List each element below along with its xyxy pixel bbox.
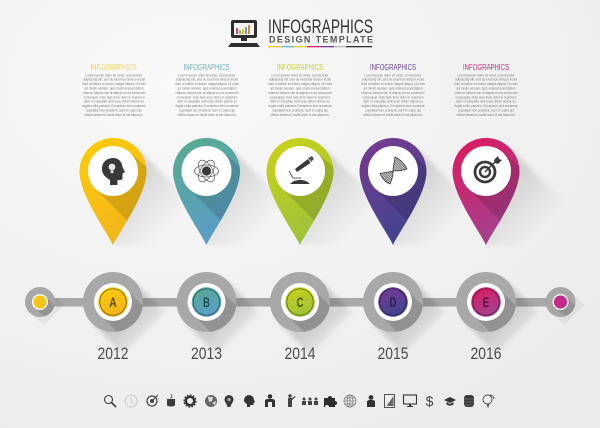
icon: head silhouette <box>244 395 255 407</box>
text block 5: Lorem ipsum dolor sit amet, consectetur <box>458 73 515 77</box>
text block 2: adipiscing elit, sed do eiusmod tempor incidi <box>176 78 238 82</box>
text block 5: ullamco laboris nisi ut aliquip ex ea commodo <box>454 91 518 95</box>
timeline bar <box>40 298 560 306</box>
icon: gear <box>184 395 196 407</box>
node C <box>270 272 352 354</box>
text block 4: Lorem ipsum dolor sit amet, consectetur <box>364 73 422 77</box>
text block 1: fugiat nulla pariatur. Excepteur sint occaecat <box>82 104 146 108</box>
text block 3: cupidatat non proident, sunt in culpa qui <box>272 108 328 112</box>
text block 4: cupidatat non proident, sunt in culpa qui <box>365 108 421 112</box>
icon: lightbulb head <box>224 395 234 407</box>
pin D: DNA helix <box>360 138 458 245</box>
header logo <box>228 17 373 47</box>
text block 4: officia deserunt mollit anim id est laborum. <box>364 113 423 117</box>
icon: globe <box>205 395 217 407</box>
text block 5: dunt ut labore et dolore magna aliqua. Ut enim <box>454 82 518 86</box>
year 2012: 2012 <box>98 344 128 363</box>
icon: magnifier <box>104 396 116 407</box>
text block 2: Lorem ipsum dolor sit amet, consectetur <box>178 73 236 77</box>
text block 1: dunt ut labore et dolore magna aliqua. Ut enim <box>82 82 146 86</box>
icon: monitor with chart <box>228 20 260 47</box>
icon: target <box>147 395 158 406</box>
text block 1: adipiscing elit, sed do eiusmod tempor incidi <box>83 78 145 82</box>
text block 1: ullamco laboris nisi ut aliquip ex ea commodo <box>82 91 146 95</box>
icon: graduation cap <box>444 397 456 406</box>
colour stripe <box>268 46 372 47</box>
text block 1: Lorem ipsum dolor sit amet, consectetur <box>86 73 143 77</box>
node D: D <box>390 294 396 310</box>
pin A: head with lightbulb <box>80 138 179 245</box>
text block 4: fugiat nulla pariatur. Excepteur sint occaecat <box>362 104 425 108</box>
year 2014: 2014 <box>284 344 316 363</box>
text block 2: consequat. Duis aute irure dolor in reprehen <box>176 95 238 99</box>
icon: dollar sign: $ <box>426 393 434 409</box>
text block 5: adipiscing elit, sed do eiusmod tempor incidi <box>455 78 517 82</box>
text block 2: cupidatat non proident, sunt in culpa qui <box>179 108 235 112</box>
text block 5: consequat. Duis aute irure dolor in reprehen <box>456 95 517 99</box>
text block 4 <box>361 63 425 117</box>
text block 5: cupidatat non proident, sunt in culpa qui <box>458 108 514 112</box>
text block 5: derit in voluptate velit esse cillum dolore eu <box>456 100 516 104</box>
text block 3: INFOGRAPHICS <box>277 63 323 72</box>
text block 5: INFOGRAPHICS <box>463 63 509 72</box>
icon: businessman <box>265 394 275 407</box>
text block 4: INFOGRAPHICS <box>370 63 416 72</box>
text block 2: derit in voluptate velit esse cillum dolore eu <box>177 100 237 104</box>
text block 3: dunt ut labore et dolore magna aliqua. Ut enim <box>268 82 332 86</box>
icon: lightbulb <box>483 395 494 407</box>
title: INFOGRAPHICS <box>268 17 373 38</box>
icon: presenter <box>288 394 296 407</box>
icon: document chart <box>384 394 394 408</box>
text block 4: ullamco laboris nisi ut aliquip ex ea commodo <box>362 91 425 95</box>
text block 5: officia deserunt mollit anim id est laborum. <box>456 113 516 117</box>
pin C: microscope <box>266 138 366 245</box>
text block 4: consequat. Duis aute irure dolor in reprehen <box>362 95 424 99</box>
year 2016: 2016 <box>470 344 502 363</box>
icon: wire globe <box>344 395 356 407</box>
node B: B <box>203 294 210 310</box>
text block 3: consequat. Duis aute irure dolor in reprehen <box>270 95 331 99</box>
text block 2 <box>175 63 239 117</box>
node D <box>363 272 445 354</box>
text block 4: ad minim veniam, quis nostrud exercitation <box>364 86 423 90</box>
text block 1: consequat. Duis aute irure dolor in reprehen <box>84 95 145 99</box>
node A: A <box>109 294 117 310</box>
text block 2: ullamco laboris nisi ut aliquip ex ea commodo <box>176 91 239 95</box>
icon: group of people <box>302 398 318 405</box>
text block 1: officia deserunt mollit anim id est laborum. <box>84 113 144 117</box>
start dot <box>25 287 64 325</box>
icon row <box>104 393 494 409</box>
text block 3: adipiscing elit, sed do eiusmod tempor incidi <box>269 78 331 82</box>
text block 1: derit in voluptate velit esse cillum dolore eu <box>84 100 144 104</box>
text block 3: ullamco laboris nisi ut aliquip ex ea commodo <box>268 91 332 95</box>
icon: person <box>367 395 375 407</box>
node C: C <box>296 294 304 310</box>
text block 3 <box>268 63 332 117</box>
text block 2: fugiat nulla pariatur. Excepteur sint occaecat <box>176 104 239 108</box>
icon: coin stack <box>464 395 474 407</box>
text block 1: ad minim veniam, quis nostrud exercitation <box>84 86 144 90</box>
text block 2: dunt ut labore et dolore magna aliqua. Ut enim <box>175 82 239 86</box>
text block 1: INFOGRAPHICS <box>90 63 136 72</box>
text block 4: dunt ut labore et dolore magna aliqua. Ut enim <box>361 82 425 86</box>
timeline <box>25 272 584 354</box>
subtitle: DESIGN TEMPLATE <box>269 34 373 44</box>
text block 2: ad minim veniam, quis nostrud exercitation <box>178 86 237 90</box>
text block 2: officia deserunt mollit anim id est laborum. <box>178 113 237 117</box>
year 2015: 2015 <box>378 344 408 363</box>
icon: clock <box>125 395 137 407</box>
text block 3: ad minim veniam, quis nostrud exercitation <box>270 86 330 90</box>
pin E: target with arrow <box>452 138 550 245</box>
text block 2: INFOGRAPHICS <box>184 63 230 72</box>
text block 5: ad minim veniam, quis nostrud exercitation <box>456 86 516 90</box>
text block 3: officia deserunt mollit anim id est laborum. <box>270 113 330 117</box>
icon: puzzle <box>324 396 337 407</box>
text block 1: cupidatat non proident, sunt in culpa qui <box>86 108 142 112</box>
node E: E <box>483 294 489 310</box>
text block 3: fugiat nulla pariatur. Excepteur sint occaecat <box>268 104 332 108</box>
text block 3: Lorem ipsum dolor sit amet, consectetur <box>272 73 329 77</box>
node E <box>456 272 538 354</box>
end dot <box>546 287 584 325</box>
year 2013: 2013 <box>191 344 222 363</box>
text block 3: derit in voluptate velit esse cillum dolore eu <box>270 100 330 104</box>
icon: monitor <box>404 395 416 407</box>
text block 4: adipiscing elit, sed do eiusmod tempor incidi <box>362 78 424 82</box>
node B <box>176 272 258 354</box>
text block 5: fugiat nulla pariatur. Excepteur sint occaecat <box>454 104 518 108</box>
icon: coffee cup <box>167 394 175 406</box>
text block 4: derit in voluptate velit esse cillum dolore eu <box>363 100 423 104</box>
node A <box>83 272 165 354</box>
text block 1 <box>82 63 146 117</box>
pin B: atom <box>173 138 272 245</box>
text block 5 <box>454 63 518 117</box>
